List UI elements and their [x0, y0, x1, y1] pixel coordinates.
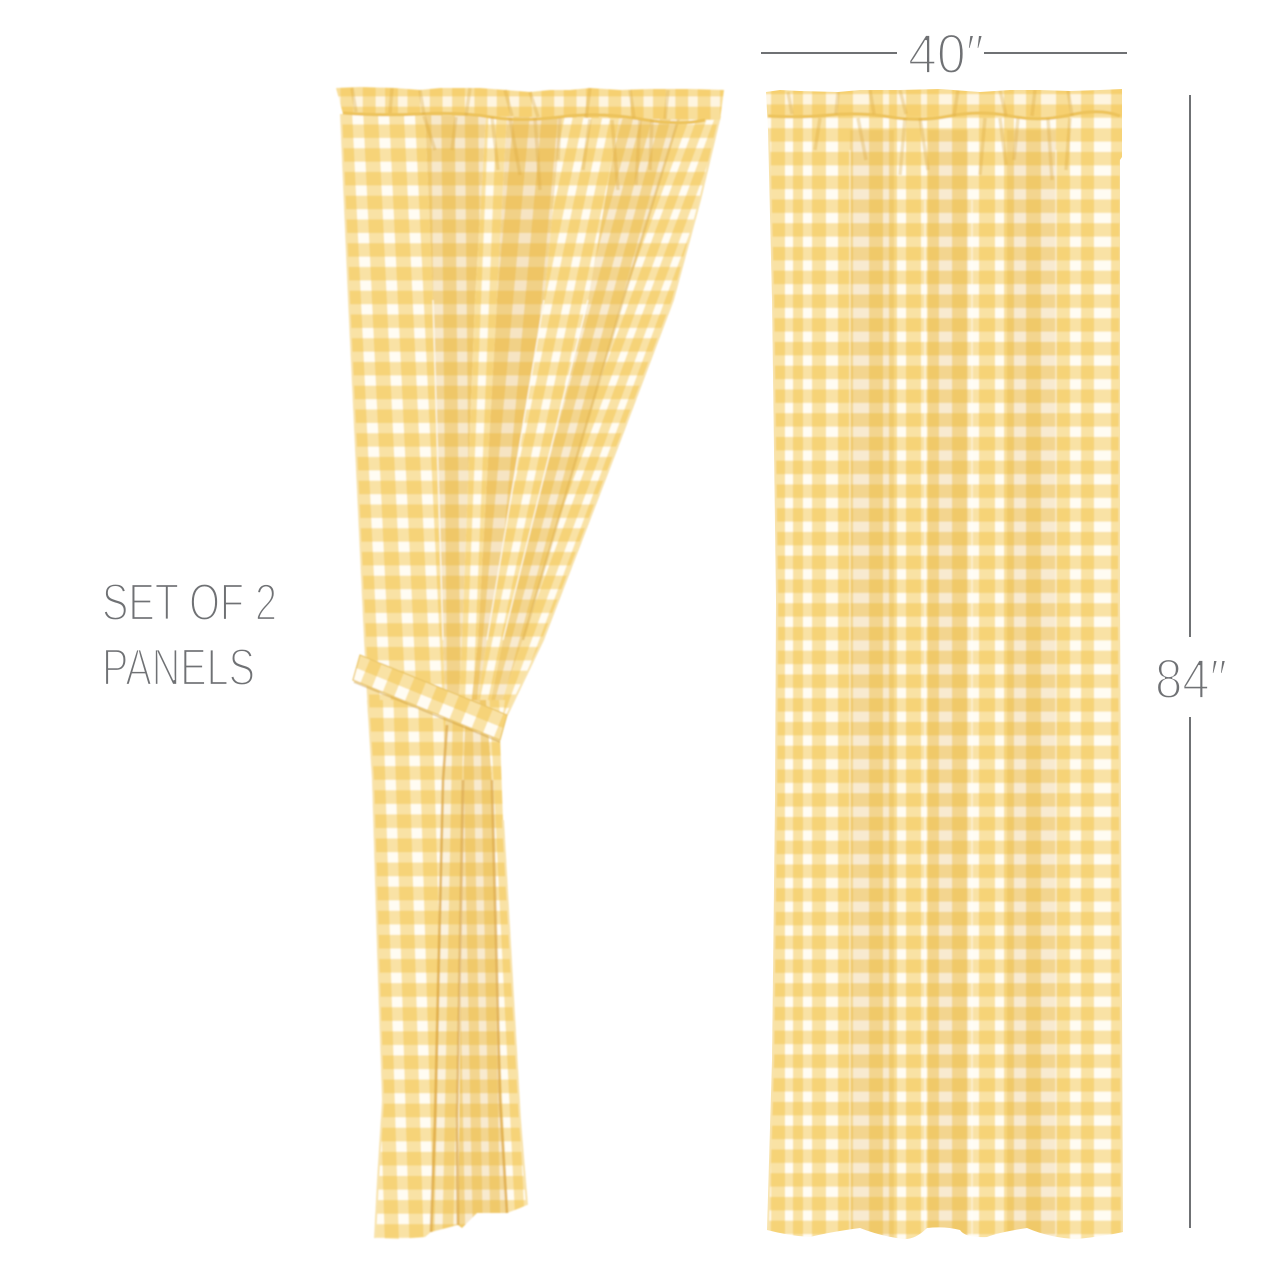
curtain panel: right, hanging flat — [760, 85, 1130, 1245]
upper fabric folds — [341, 114, 720, 715]
header tint — [766, 89, 1122, 116]
horizontal gingham stripes — [760, 85, 1130, 1245]
vertical gingham stripes — [771, 85, 1124, 1245]
curtain panel: left, gathered with tie-back — [336, 87, 724, 1239]
selvage edges — [767, 130, 1123, 1232]
label: set of 2 panels: PANELS — [102, 639, 255, 697]
dimension: width 40 inches: 40″ — [908, 22, 984, 85]
lower fabric folds — [368, 700, 527, 1239]
label: set of 2 panels — [102, 574, 277, 697]
tie-back band — [353, 655, 507, 742]
dimension: length 84 inches: 84″ — [1155, 647, 1227, 710]
curtain header with gathered rod pocket — [336, 87, 724, 190]
label: set of 2 panels: SET OF 2 — [102, 574, 277, 632]
rod pocket gather — [768, 112, 1120, 119]
fold shading — [850, 130, 1056, 1240]
